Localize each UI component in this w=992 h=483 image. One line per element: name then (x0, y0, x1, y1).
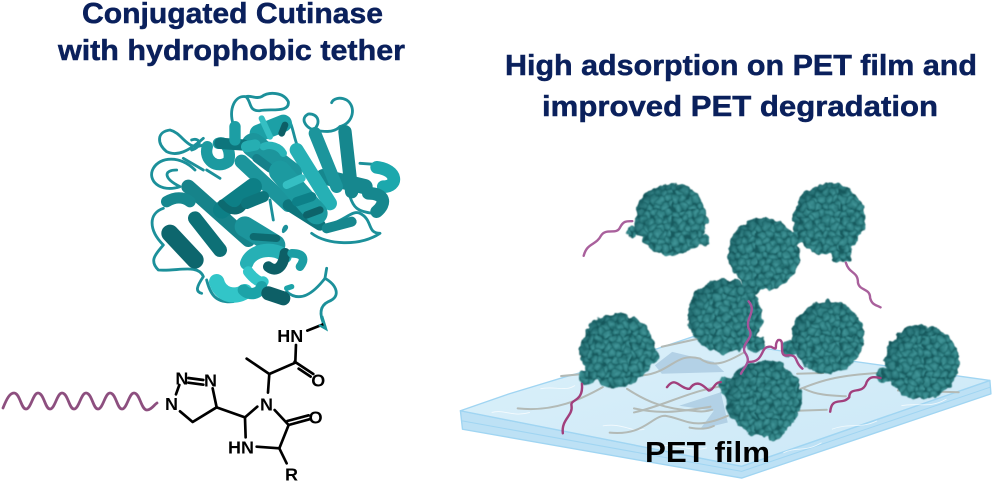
atom labels: HN (228, 437, 254, 457)
protein loops (152, 93, 383, 327)
title: conjugated cutinase (57, 0, 405, 67)
enzyme particle: right middle (782, 301, 864, 373)
bonds (176, 324, 324, 463)
enzyme particle: top right (793, 183, 865, 263)
atom labels: N (175, 369, 188, 389)
enzyme particle: far right (877, 325, 959, 399)
title: high adsorption (505, 50, 977, 123)
texture (492, 378, 946, 453)
tether: front (667, 382, 721, 391)
tether: tangle (749, 340, 802, 369)
atom labels: O (309, 407, 323, 427)
atom labels: N (260, 395, 273, 415)
title: high adsorption: improved PET degradation (542, 91, 938, 123)
film surface (460, 337, 990, 466)
film slab (460, 380, 991, 478)
title: conjugated cutinase: with hydrophobic tether (57, 35, 405, 67)
protein attachment line (319, 316, 326, 329)
enzyme particle: left (579, 313, 659, 387)
hydrophobic tethers (563, 221, 881, 433)
atom labels (165, 326, 325, 483)
PET film label: PET film (645, 437, 770, 469)
atom labels: HN (277, 326, 303, 346)
tether: top left (584, 221, 632, 256)
title: high adsorption: High adsorption on PET film and (505, 50, 977, 82)
tether: top right (846, 263, 881, 307)
tether: central (741, 301, 752, 374)
beta strands (170, 132, 365, 260)
enzyme particle: middle (688, 279, 765, 353)
enzyme particle: front (718, 360, 802, 441)
polymer strands (518, 338, 959, 433)
atom labels: O (311, 370, 325, 390)
chemical structure (165, 324, 325, 483)
tether: right (830, 377, 881, 412)
film edge line (462, 387, 990, 471)
cutinase ribbon structure (152, 93, 394, 327)
tether: left (563, 384, 582, 433)
enzyme particle: upper middle (728, 218, 805, 293)
hydrophobic tether wave (3, 393, 157, 410)
PET film (460, 337, 991, 478)
alpha helices (167, 118, 394, 298)
atom labels: N (204, 371, 217, 391)
film shadows (655, 352, 728, 429)
enzyme particle: top left (626, 183, 709, 255)
atom labels: N (165, 394, 178, 414)
